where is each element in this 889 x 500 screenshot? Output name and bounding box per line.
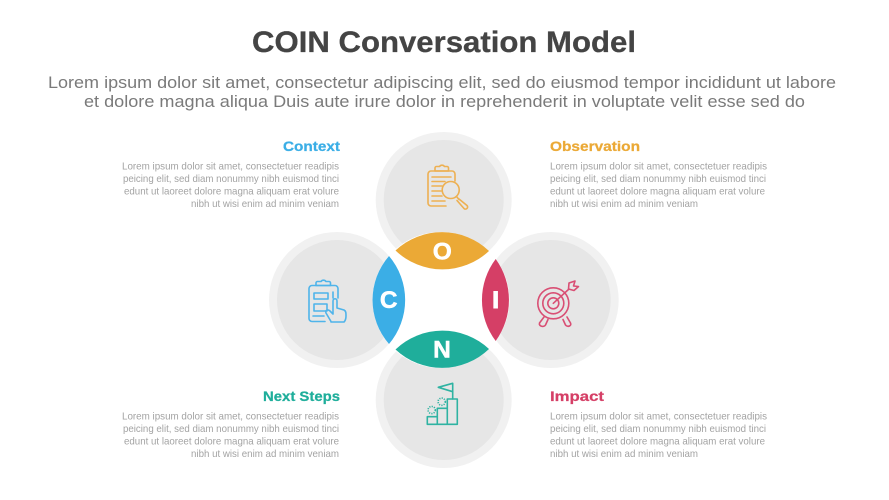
text block: Next Steps: Lorem ipsum dolor sit amet, consectetuer readipis xyxy=(122,412,339,422)
lens: C xyxy=(373,256,405,344)
text block: Context: peicing elit, sed diam nonummy nibh euismod tinci xyxy=(123,174,339,185)
text block: Observation: Observation xyxy=(550,138,640,154)
text block: Observation: peicing elit, sed diam nonummy nibh euismod tinci xyxy=(550,174,766,185)
text block: Context xyxy=(122,138,340,210)
text block: Next Steps: edunt ut laoreet dolore magna aliquam erat volure xyxy=(124,436,339,448)
text block: Observation: Lorem ipsum dolor sit amet, consectetuer readipis xyxy=(550,162,767,172)
icon: clipboard with hand xyxy=(309,280,346,322)
text block: Impact xyxy=(550,388,767,460)
text block: Context: nibh ut wisi enim ad minim veniam xyxy=(191,199,339,210)
text block: Impact: Lorem ipsum dolor sit amet, consectetuer readipis xyxy=(550,412,767,422)
lens: I: I xyxy=(492,287,499,314)
text block: Context: Lorem ipsum dolor sit amet, consectetuer readipis xyxy=(122,162,339,172)
panel: right circle xyxy=(483,232,619,368)
text block: Next Steps: nibh ut wisi enim ad minim veniam xyxy=(191,449,339,460)
text block: Context: Context xyxy=(283,138,340,154)
title: COIN Conversation Model xyxy=(252,26,636,59)
text block: Impact: Impact xyxy=(550,388,604,404)
panel: top circle xyxy=(376,132,512,268)
lens: O xyxy=(396,232,489,269)
lens: C: C xyxy=(380,287,398,314)
icon: clipboard with magnifier xyxy=(428,165,468,209)
panel: left circle xyxy=(269,232,405,368)
text block: Impact: peicing elit, sed diam nonummy nibh euismod tinci xyxy=(550,424,766,435)
lens: I xyxy=(482,259,509,341)
center white shape xyxy=(372,232,510,368)
panel: bottom circle xyxy=(376,332,512,468)
lens: N xyxy=(396,331,489,368)
subtitle xyxy=(48,73,836,111)
text block: Next Steps: Next Steps xyxy=(263,388,340,404)
icon: target with arrow xyxy=(538,281,578,326)
subtitle: et dolore magna aliqua Duis aute irure dolor in reprehenderit in voluptate velit esse sed do xyxy=(84,92,805,111)
lens: N: N xyxy=(433,336,451,364)
text block: Context: edunt ut laoreet dolore magna aliquam erat volure xyxy=(124,186,339,198)
text block: Observation: nibh ut wisi enim ad minim veniam xyxy=(550,199,698,210)
text block: Observation xyxy=(550,138,767,210)
text block: Impact: nibh ut wisi enim ad minim veniam xyxy=(550,449,698,460)
icon: steps with flag xyxy=(427,383,457,424)
text block: Impact: edunt ut laoreet dolore magna aliquam erat volure xyxy=(550,436,765,448)
subtitle: Lorem ipsum dolor sit amet, consectetur adipiscing elit, sed do eiusmod tempor incididunt ut labore xyxy=(48,73,836,92)
lens: O: O xyxy=(433,238,452,265)
text block: Observation: edunt ut laoreet dolore magna aliquam erat volure xyxy=(550,186,765,198)
text block: Next Steps xyxy=(122,388,340,460)
text block: Next Steps: peicing elit, sed diam nonummy nibh euismod tinci xyxy=(123,424,339,435)
